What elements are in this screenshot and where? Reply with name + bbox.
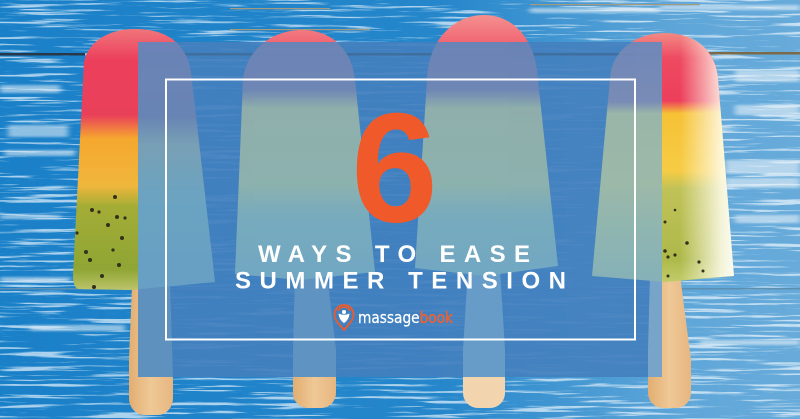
popsicle 4 body [592, 33, 734, 282]
white frame [166, 80, 635, 340]
popsicle 1 [73, 29, 215, 415]
headline line 2: SUMMER TENSION [235, 268, 566, 294]
plank seam through the panel [138, 53, 662, 56]
popsicle 1 body [73, 29, 215, 290]
logo wordmark: massagebook [358, 308, 454, 327]
popsicle 2 stick [293, 275, 336, 408]
popsicle 4 stick [648, 275, 691, 408]
popsicle 4 [592, 33, 734, 408]
big number 6: 6 [351, 82, 438, 256]
veiled popsicles seen through the panel [138, 42, 662, 377]
popsicle 3 stick [463, 270, 505, 408]
logo: massagebook [334, 305, 454, 330]
popsicle 3 [415, 15, 558, 408]
headline [235, 241, 566, 294]
popsicle 2 body [235, 30, 375, 280]
popsicle 2 [235, 30, 375, 408]
headline line 1: WAYS TO EASE [258, 241, 530, 268]
popsicle 1 stick [129, 285, 173, 415]
popsicle 3 body [415, 15, 558, 276]
popsicle 4 pale frosted edge [680, 34, 734, 280]
logo icon: location pin with person [334, 305, 354, 330]
translucent blue overlay panel [138, 42, 662, 377]
kiwi seeds on outer popsicles [75, 195, 704, 289]
